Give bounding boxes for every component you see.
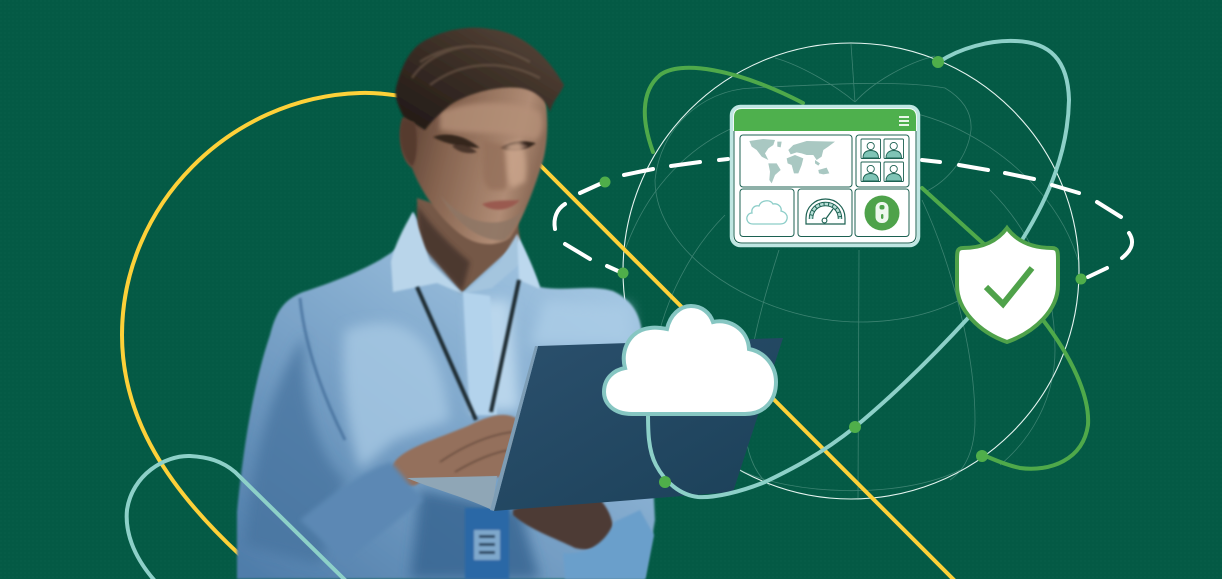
neck xyxy=(417,198,520,292)
cloud panel xyxy=(740,189,794,236)
ear xyxy=(401,120,417,166)
world map xyxy=(749,139,835,183)
green orbit xyxy=(645,68,1088,469)
dashboard card xyxy=(732,106,918,246)
neck shadow xyxy=(417,205,470,292)
laptop keyboard base xyxy=(407,476,497,510)
badge xyxy=(465,508,509,579)
sleeve seam xyxy=(300,298,345,440)
yellow curve and diagonal xyxy=(122,93,955,579)
padlock icon xyxy=(876,202,888,223)
hair xyxy=(396,28,564,130)
person with laptop xyxy=(237,28,783,579)
shirt shading xyxy=(245,300,635,579)
dashed orbit xyxy=(554,159,1132,277)
left cuff xyxy=(300,462,423,562)
head and face xyxy=(400,75,547,244)
right hand xyxy=(513,488,613,549)
orbit nodes xyxy=(600,56,1086,488)
cloud icon xyxy=(604,306,776,414)
gauge panel xyxy=(798,189,852,236)
collar xyxy=(391,212,463,294)
fingers xyxy=(440,432,512,472)
map panel xyxy=(740,135,852,187)
teal orbit lower and left arch xyxy=(127,317,969,579)
check mark xyxy=(986,268,1032,304)
face shadows xyxy=(433,103,542,240)
shield with check xyxy=(957,228,1058,342)
shirt placket xyxy=(463,292,497,415)
left hand xyxy=(391,415,516,486)
laptop lid xyxy=(494,338,783,511)
right cuff xyxy=(563,510,654,579)
inner card line xyxy=(734,131,916,243)
card header xyxy=(734,109,916,131)
teal orbit upper xyxy=(939,41,1069,240)
people panel xyxy=(856,135,909,187)
wireframe globe xyxy=(623,43,1079,500)
lock panel xyxy=(855,189,909,236)
hair highlights xyxy=(412,46,540,85)
laptop lid edge xyxy=(490,346,538,511)
lanyard xyxy=(417,280,519,420)
menu icon xyxy=(899,116,909,126)
shirt xyxy=(237,212,655,579)
